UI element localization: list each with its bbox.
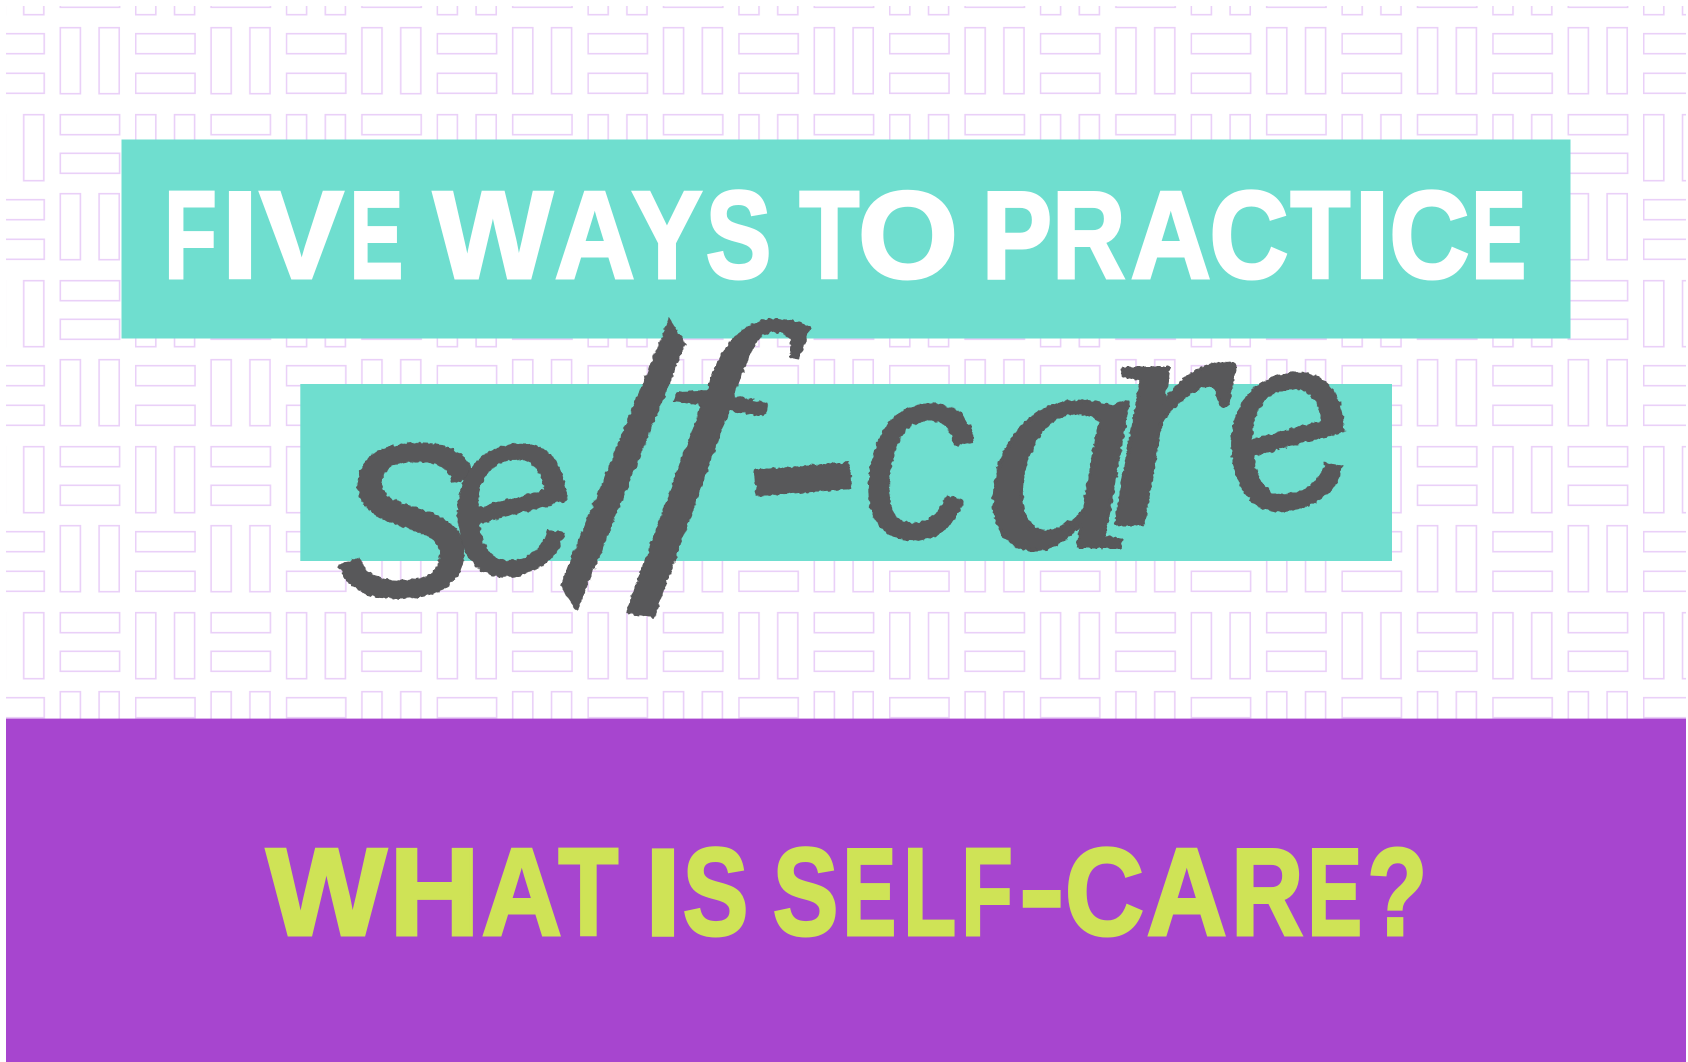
- title text: O: [858, 167, 958, 305]
- purple section: [6, 719, 1686, 1062]
- title text: E: [1472, 167, 1526, 305]
- handwritten word self-care: r: [1102, 221, 1240, 598]
- handwritten word self-care: -: [720, 257, 883, 647]
- section heading: what is self-care?: F: [961, 824, 1013, 962]
- title text: T: [799, 167, 859, 305]
- handwritten word self-care: s: [338, 339, 480, 657]
- title text: V: [260, 167, 344, 305]
- section heading: what is self-care?: A: [482, 824, 562, 962]
- section heading: what is self-care?: E: [843, 824, 896, 962]
- section heading: what is self-care?: R: [1231, 824, 1303, 962]
- title text: I: [1354, 167, 1390, 305]
- section heading: what is self-care?: W: [266, 824, 387, 962]
- section heading: what is self-care?: E: [1308, 824, 1362, 962]
- title text: E: [350, 167, 403, 305]
- section heading: what is self-care?: C: [1065, 824, 1144, 962]
- title text: S: [706, 167, 771, 305]
- section heading: what is self-care?: -: [1019, 820, 1064, 958]
- section heading: what is self-care?: H: [389, 824, 480, 962]
- title text: P: [982, 167, 1052, 305]
- section heading: what is self-care?: I: [645, 824, 681, 962]
- script banner: self-care: [300, 221, 1392, 677]
- section heading: what is self-care?: S: [773, 824, 838, 962]
- title text: Y: [632, 167, 702, 305]
- title text: I: [222, 167, 258, 305]
- handwritten word self-care: a: [985, 272, 1140, 615]
- handwritten word self-care: l: [484, 231, 860, 677]
- handwritten word self-care: f: [622, 238, 826, 639]
- title text: A: [1130, 167, 1211, 305]
- section heading: what is self-care?: A: [1146, 824, 1227, 962]
- background weave pattern: [6, 6, 1686, 719]
- title text: F: [164, 167, 217, 305]
- section heading: what is self-care?: L: [903, 824, 956, 962]
- title text: C: [1209, 167, 1289, 305]
- handwritten word self-care: e: [1183, 272, 1385, 572]
- title text: C: [1389, 167, 1470, 305]
- section heading: what is self-care?: S: [683, 824, 748, 962]
- section heading: what is self-care?: T: [558, 824, 618, 962]
- title text: A: [554, 167, 635, 305]
- handwritten word self-care: c: [861, 312, 976, 591]
- title text: R: [1052, 167, 1125, 305]
- title banner: five ways to practice: [122, 140, 1570, 338]
- title text: T: [1290, 167, 1350, 305]
- section heading: what is self-care?: ?: [1367, 824, 1427, 962]
- handwritten word self-care: e: [411, 347, 605, 635]
- title text: W: [433, 167, 553, 305]
